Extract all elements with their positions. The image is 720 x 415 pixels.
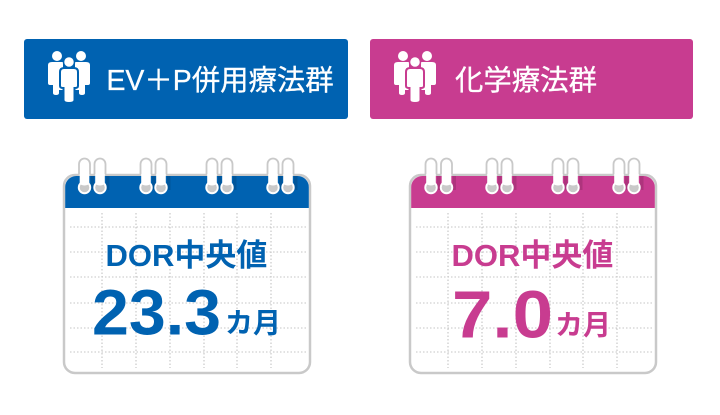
icon: group of people [394,51,436,103]
banner label: EV+P: EV＋P併用療法群 [106,65,334,97]
banner label: chemotherapy: 化学療法群 [455,65,597,97]
value: 23.3 months: カ月 [225,308,281,338]
banner: chemotherapy group [370,39,693,119]
value: 23.3 months [92,276,281,348]
value: 7.0 months [452,278,611,352]
icon: group of people [48,51,90,103]
value: 7.0 months: 7.0 [452,278,553,352]
calendar rings [78,158,298,194]
banner: EV+P combination therapy group [24,39,348,119]
calendar: EV+P DOR [64,158,310,373]
calendar rings [424,158,644,194]
label: DOR median: DOR中央値 [452,238,613,273]
value: 23.3 months: 23.3 [92,276,221,348]
label: DOR median: DOR中央値 [106,238,267,273]
value: 7.0 months: カ月 [555,310,611,340]
calendar: chemotherapy DOR [410,158,656,373]
